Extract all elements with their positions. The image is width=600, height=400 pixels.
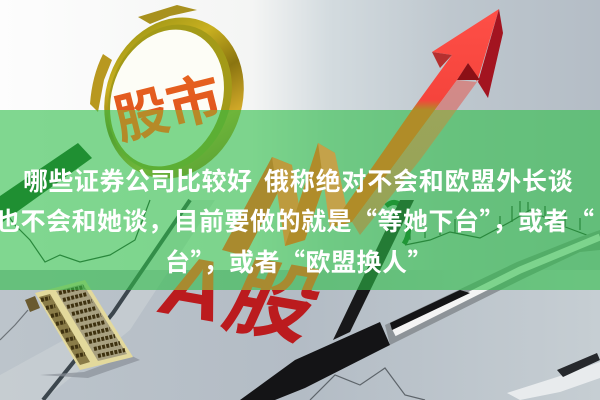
small pen at right	[507, 353, 600, 400]
green banner	[0, 110, 600, 290]
title line 2: 也不会和她谈，目前要做的就是“等她下台”，或者“	[0, 202, 595, 238]
ring on paper below lens	[386, 202, 409, 244]
red arrow	[330, 9, 503, 235]
chart lines on paper	[0, 200, 600, 400]
abacus	[25, 280, 140, 378]
magnifying glass handle	[0, 143, 92, 224]
pen	[240, 200, 600, 400]
lens text 股市: 股市	[108, 67, 228, 152]
A股 red label: A股	[153, 236, 325, 358]
magnifying glass ring	[82, 0, 266, 198]
paper fold line	[43, 200, 190, 400]
title line 1: 俄称绝对不会和欧盟外长谈	[264, 162, 574, 198]
zigzag arrow body	[222, 143, 348, 256]
title text	[0, 162, 595, 279]
title line 3: 台”，或者“欧盟换人”	[165, 243, 433, 279]
title line 1: 哪些证券公司比较好	[23, 162, 253, 198]
